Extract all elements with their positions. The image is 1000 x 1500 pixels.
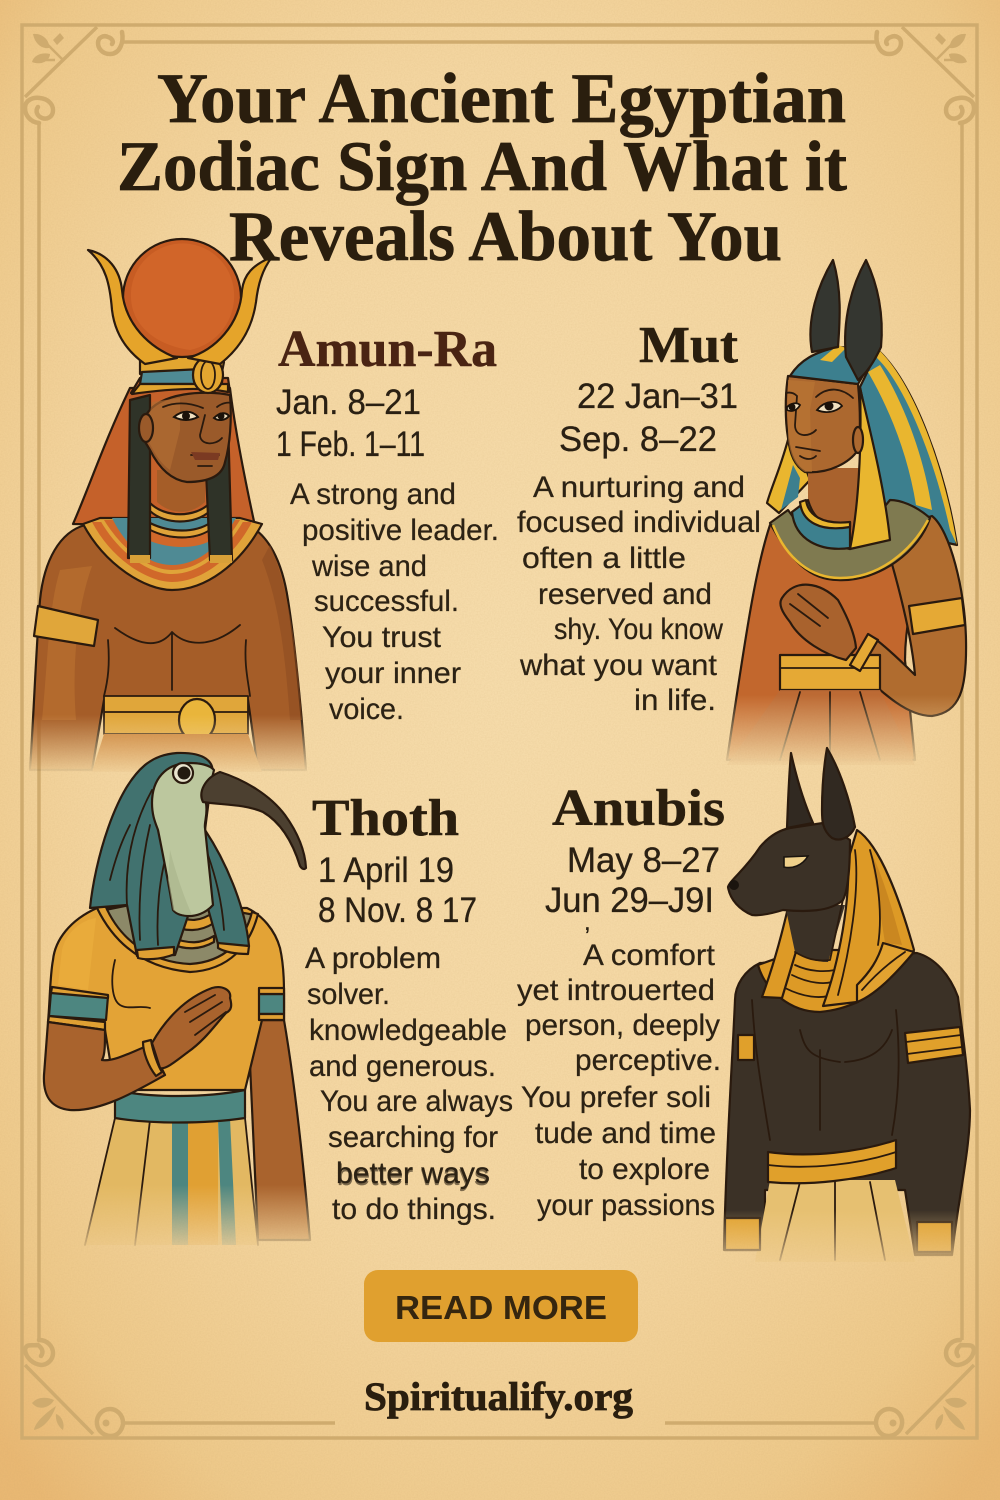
button: read more: READ MORE xyxy=(395,1289,607,1326)
description: Anubis: You prefer soli xyxy=(521,1081,711,1114)
Thoth nemes headcloth xyxy=(90,753,249,959)
Thoth arm and body xyxy=(48,908,310,1240)
description: Thoth: better ways xyxy=(337,1159,489,1192)
Mut front lappet xyxy=(850,388,890,549)
Thoth ibis head xyxy=(152,763,214,916)
description: Anubis: A comfort xyxy=(583,939,716,972)
description: Anubis: your passions xyxy=(537,1189,715,1222)
Thoth forearm and hand xyxy=(44,987,231,1110)
title: Your Ancient Egyptian xyxy=(157,60,846,138)
Amun-Ra face xyxy=(144,393,231,482)
description: Mut: shy. You know xyxy=(554,613,723,646)
description: Mut: in life. xyxy=(634,684,716,717)
description: Anubis: to explore xyxy=(579,1153,710,1186)
description: Anubis: yet introuerted xyxy=(517,974,715,1007)
dates: Amun-Ra: 1 Feb. 1–11 xyxy=(276,425,425,464)
description: Thoth: You are always xyxy=(320,1085,513,1118)
description: Thoth: knowledgeable xyxy=(309,1014,507,1047)
Anubis right armband xyxy=(905,1027,963,1063)
Thoth beak xyxy=(201,772,306,869)
dates: Mut: 22 Jan–31 xyxy=(577,377,738,416)
dates: Thoth: 8 Nov. 8 17 xyxy=(318,891,477,930)
figure: Amun-Ra xyxy=(30,239,306,772)
description: Anubis: perceptive. xyxy=(575,1044,721,1077)
Anubis kilt xyxy=(725,1140,952,1262)
dates: Amun-Ra: Jan. 8–21 xyxy=(276,383,421,422)
Anubis left armband xyxy=(738,1035,754,1060)
panel: Thoth text xyxy=(305,790,513,1226)
description: Thoth: to do things. xyxy=(332,1193,496,1226)
description: Anubis: person, deeply xyxy=(525,1009,720,1042)
heading: Anubis: Anubis xyxy=(552,780,725,837)
footer: website: Spiritualify.org xyxy=(364,1374,633,1419)
Mut face xyxy=(786,376,860,472)
panel: Mut text xyxy=(517,317,761,717)
description: Amun-Ra: A strong and xyxy=(290,478,456,511)
Mut headdress back xyxy=(767,350,957,545)
dates: Anubis: May 8–27 xyxy=(567,841,720,880)
heading: Mut: Mut xyxy=(639,317,739,374)
Anubis neck and head xyxy=(728,823,850,962)
description: Anubis: tude and time xyxy=(535,1117,716,1150)
description: Mut: what you want xyxy=(519,649,718,682)
dates: Anubis: Jun 29–J9I xyxy=(545,881,714,920)
Mut neck and collar xyxy=(770,468,930,580)
Thoth collar xyxy=(97,905,258,972)
Anubis gold collar xyxy=(757,948,859,1013)
description: Mut: focused individual xyxy=(517,506,761,539)
dates: Amun-Ra xyxy=(276,383,425,464)
description: Amun-Ra: wise and xyxy=(311,550,427,583)
description: Mut: reserved and xyxy=(538,578,712,611)
description: Mut: A nurturing and xyxy=(533,471,745,504)
Amun-Ra hair lappets xyxy=(128,395,150,558)
description: Amun-Ra xyxy=(290,478,499,726)
Anubis headdress xyxy=(762,830,914,1006)
description: Mut: often a little xyxy=(522,542,686,575)
description: Mut xyxy=(517,471,761,717)
Amun-Ra headcloth xyxy=(73,388,255,526)
description: Amun-Ra: successful. xyxy=(314,585,459,618)
description: Amun-Ra: positive leader. xyxy=(302,514,499,547)
button: read more xyxy=(364,1270,638,1342)
Amun-Ra sun disc and horns xyxy=(88,239,272,364)
Mut hand on chest xyxy=(780,585,856,660)
heading: Amun-Ra: Amun-Ra xyxy=(278,321,497,378)
panel: Amun-Ra text xyxy=(276,321,499,726)
dates: Mut: Sep. 8–22 xyxy=(559,420,717,459)
dates: Mut xyxy=(559,377,738,459)
description: Amun-Ra: voice. xyxy=(329,693,404,726)
Amun-Ra body xyxy=(30,525,306,770)
Amun-Ra collar xyxy=(83,470,262,590)
description: Thoth: solver. xyxy=(307,978,390,1011)
description: Anubis xyxy=(517,939,721,1222)
dates: Thoth: 1 April 19 xyxy=(318,851,454,890)
Mut headband and ears xyxy=(790,260,882,384)
panel: Anubis text xyxy=(517,780,725,1222)
description: Thoth: better ways xyxy=(336,1157,490,1190)
title: Zodiac Sign And What it xyxy=(117,128,847,206)
description: Thoth: and generous. xyxy=(309,1050,496,1083)
description: Thoth: searching for xyxy=(328,1121,498,1154)
Mut body and dress xyxy=(727,520,930,760)
Thoth kilt xyxy=(85,1090,258,1245)
dates: Anubis xyxy=(545,841,720,936)
description: Thoth xyxy=(305,942,513,1226)
figure: Mut xyxy=(727,260,966,765)
Anubis body xyxy=(724,953,970,1255)
title xyxy=(117,60,847,276)
Amun-Ra headband xyxy=(131,354,230,394)
description: Amun-Ra: your inner xyxy=(325,657,461,690)
heading: Thoth: Thoth xyxy=(312,790,459,847)
description: Thoth: A problem xyxy=(305,942,441,975)
Thoth armbands xyxy=(48,987,284,1030)
figure: Anubis xyxy=(724,748,970,1262)
dates: Thoth xyxy=(318,851,477,930)
Anubis ears xyxy=(787,748,855,840)
description: Amun-Ra: You trust xyxy=(322,621,442,654)
figure: Thoth xyxy=(44,753,310,1245)
dates: Anubis: , xyxy=(584,909,591,936)
title: Reveals About You xyxy=(229,198,782,276)
